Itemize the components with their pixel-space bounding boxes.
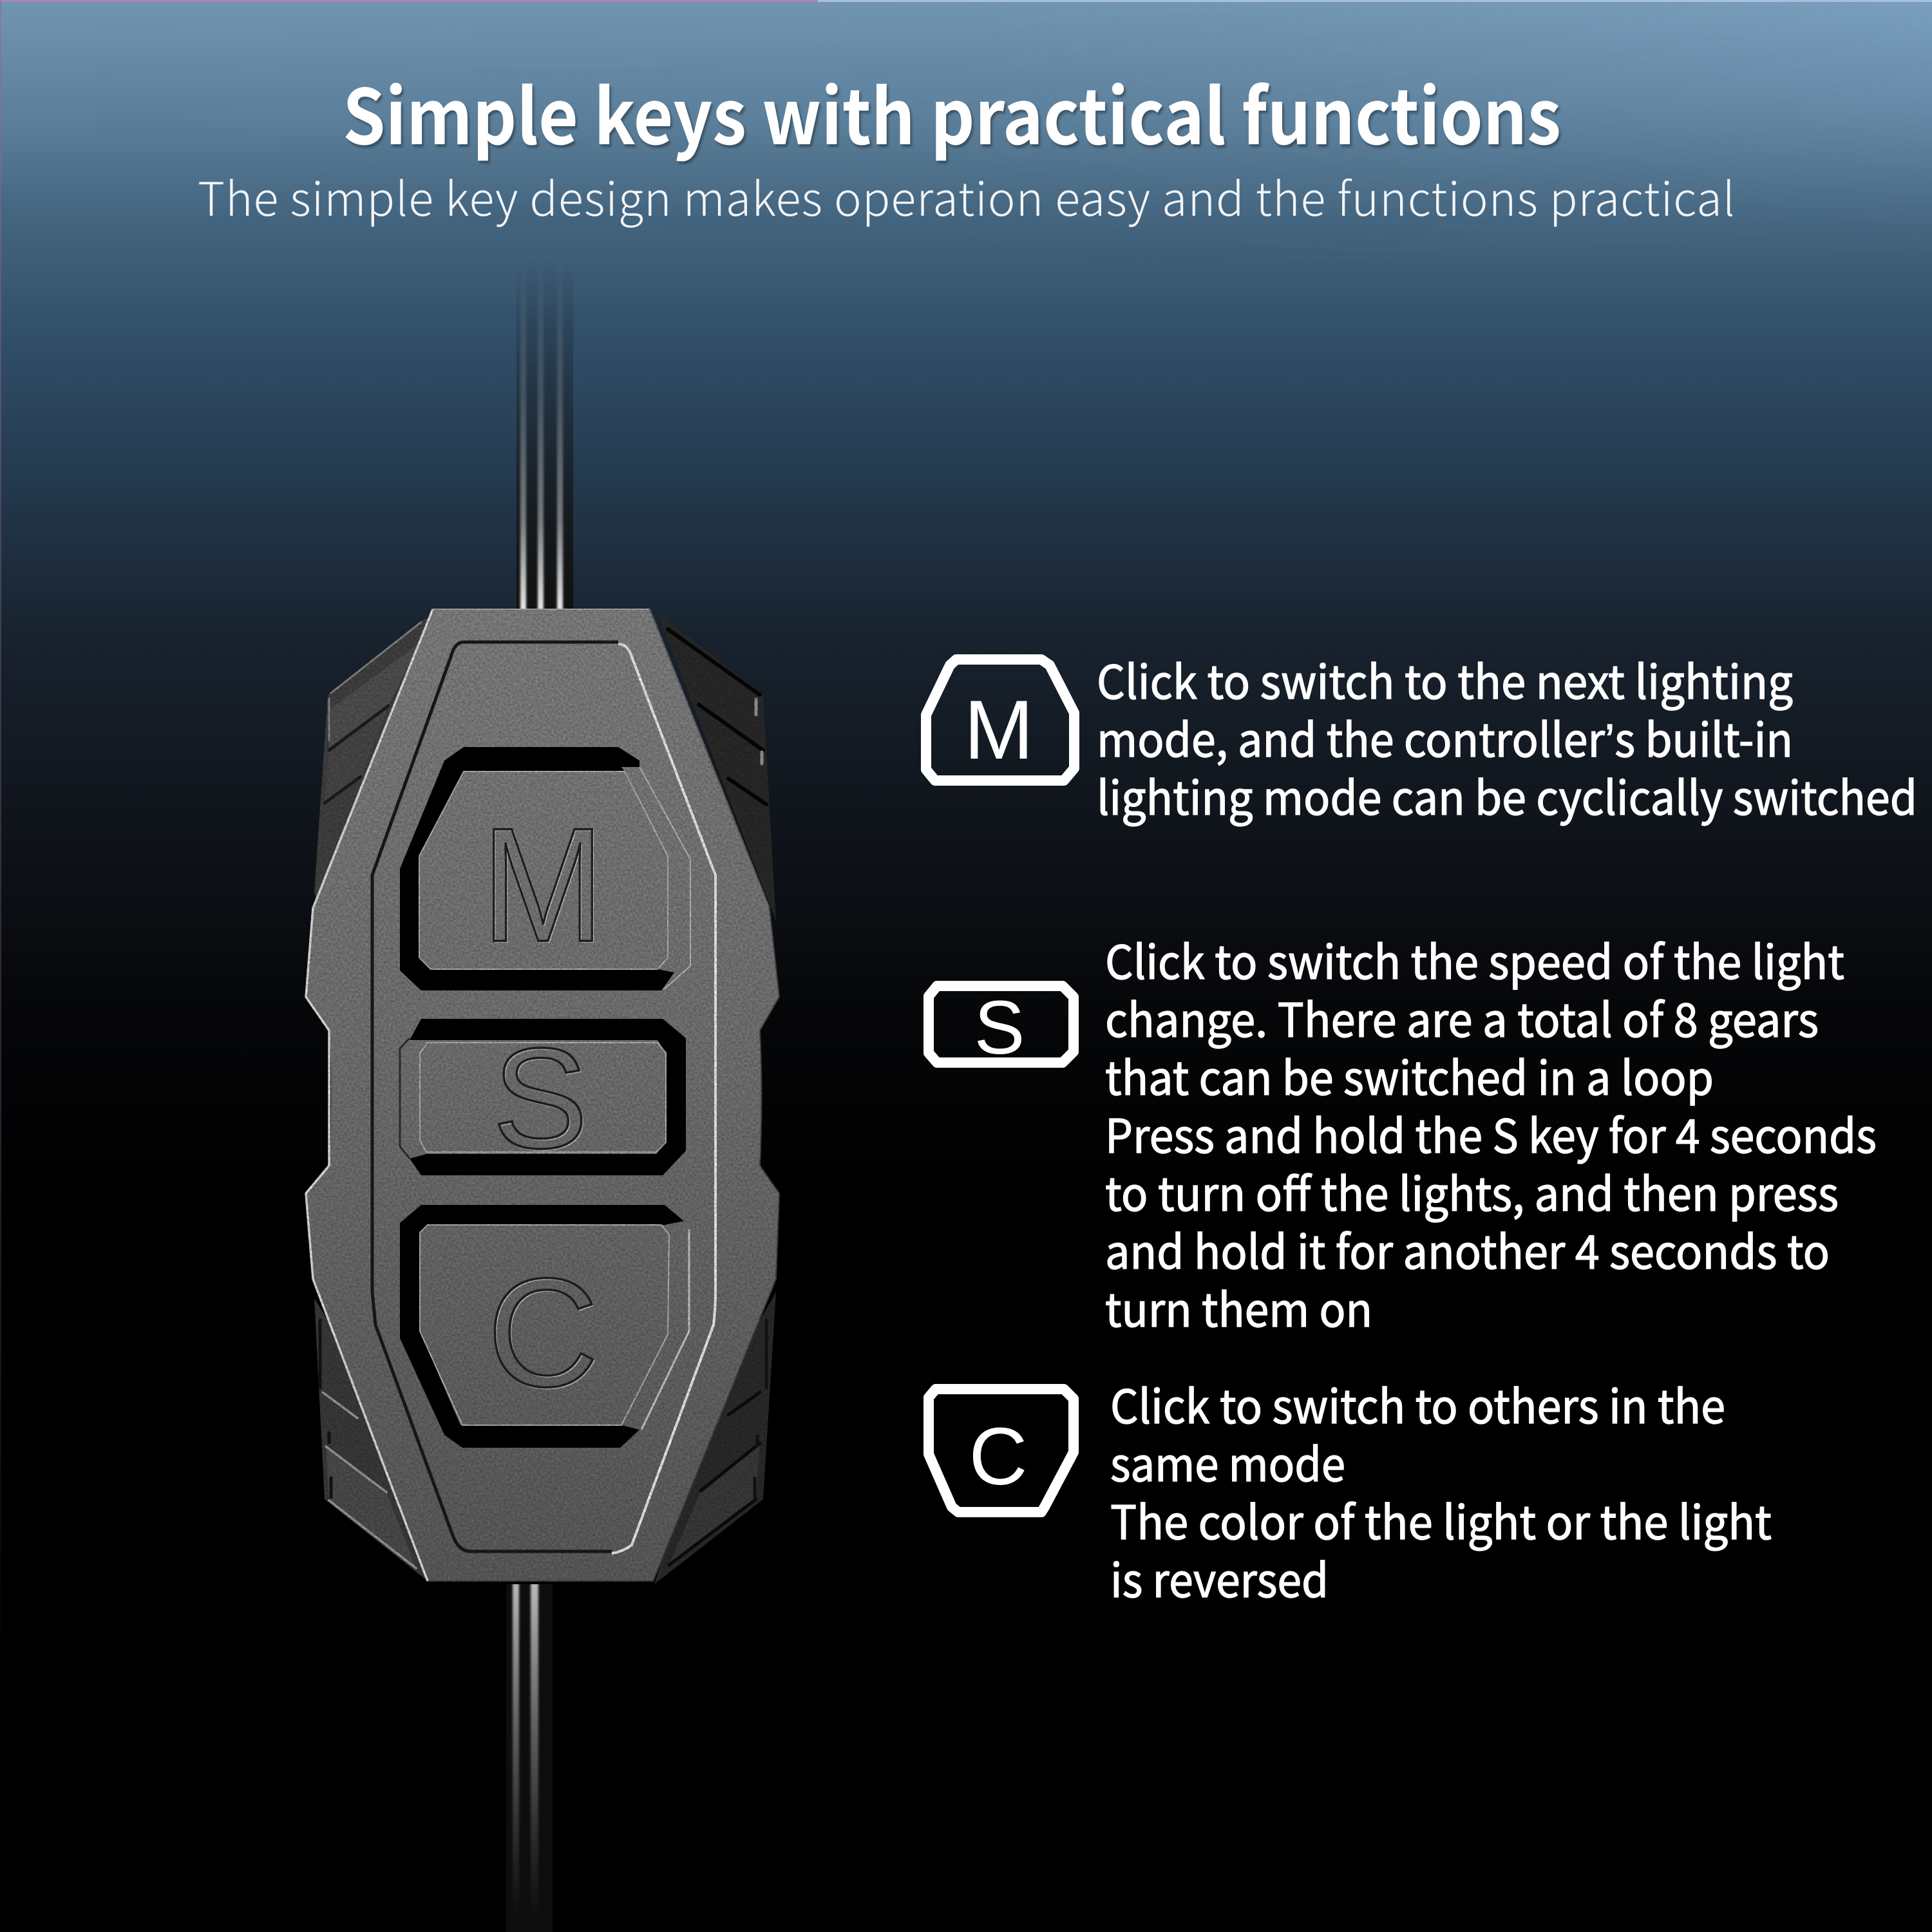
S key groove: [410, 1019, 686, 1175]
text: S key description: to turn off the lights, and then press: [1105, 1157, 1839, 1224]
M letter engraved: M: [483, 796, 605, 977]
M key groove: [400, 747, 674, 990]
icon: S key: S: [974, 985, 1025, 1070]
text: S key description: Press and hold the S key for 4 seconds: [1105, 1099, 1877, 1166]
text: C key description: same mode: [1110, 1427, 1345, 1495]
text: C key description: [1110, 1369, 1772, 1611]
text: C key description: The color of the light or the light: [1110, 1485, 1772, 1553]
text: M key description: mode, and the controller’s built-in: [1097, 703, 1793, 770]
icon: C key: [929, 1389, 1074, 1512]
text: M key description: Click to switch to the next lighting: [1097, 645, 1793, 712]
text: S key description: turn them on: [1105, 1273, 1372, 1340]
text: S key description: that can be switched in a loop: [1105, 1041, 1714, 1108]
cable: bottom: [506, 1584, 553, 1932]
C letter engraved: C: [487, 1246, 599, 1419]
icon: C key: C: [969, 1411, 1028, 1502]
title: Simple keys with practical functions: [343, 56, 1561, 166]
icon: M key: M: [964, 683, 1034, 777]
text: S key description: [1105, 925, 1877, 1340]
subtitle: The simple key design makes operation easy and the functions practical: [198, 162, 1735, 229]
text: C key description: Click to switch to others in the: [1110, 1369, 1725, 1437]
icon: S key: [929, 985, 1074, 1070]
C key face: [420, 1225, 669, 1425]
plate edge highlights: [306, 609, 770, 1581]
front plate: [306, 609, 779, 1581]
M letter engraved: M: [482, 795, 604, 976]
cable: top: [516, 258, 573, 609]
M key face: [419, 772, 668, 969]
inner panel line: [372, 642, 715, 1553]
text: S key description: and hold it for another 4 seconds to: [1105, 1215, 1830, 1282]
M key: [400, 747, 690, 990]
text: S key description: Click to switch the speed of the light: [1105, 925, 1844, 992]
side wings: [314, 606, 776, 1584]
S key: [400, 1019, 686, 1180]
controller device: [306, 606, 779, 1584]
S letter engraved: S: [494, 1020, 589, 1180]
S key face: [420, 1043, 666, 1152]
text: S key description: change. There are a total of 8 gears: [1105, 983, 1819, 1050]
C key groove: [400, 1205, 684, 1448]
C letter engraved: C: [488, 1247, 600, 1420]
C key: [400, 1205, 689, 1448]
icon: M key: [926, 659, 1074, 781]
S letter engraved: S: [493, 1019, 588, 1179]
text: C key description: is reversed: [1110, 1543, 1329, 1611]
text: M key description: [1097, 645, 1917, 828]
